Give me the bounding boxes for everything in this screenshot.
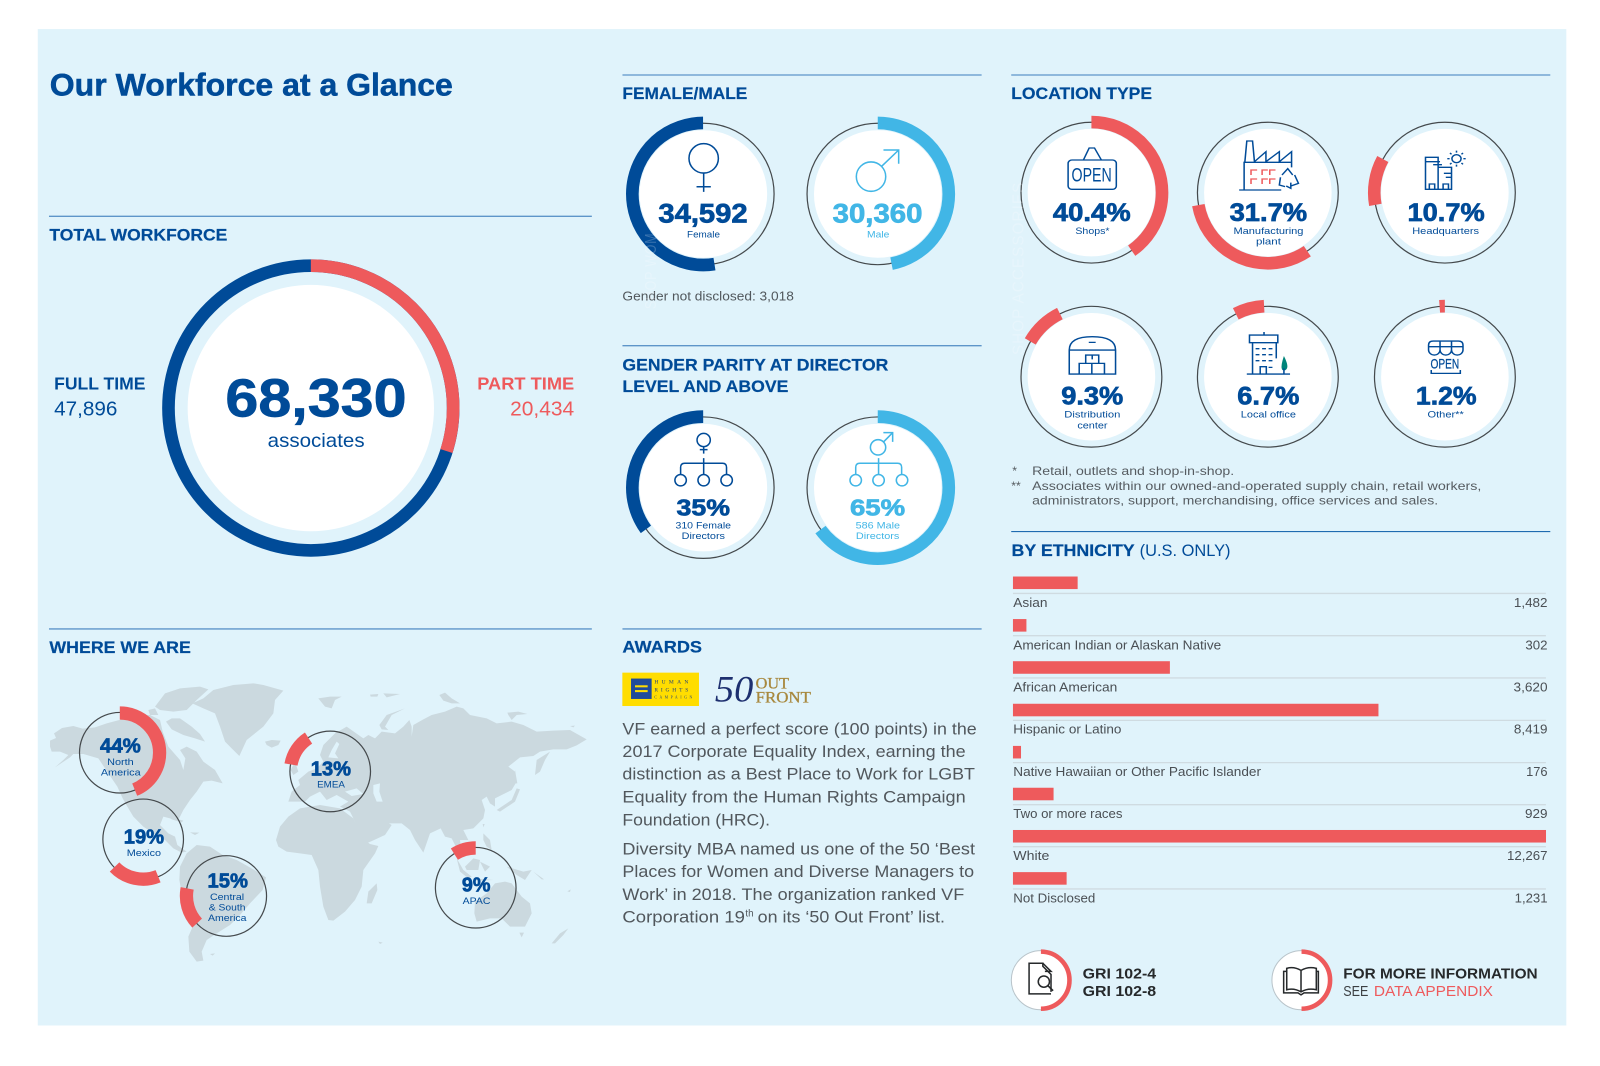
icon: open sign: OPEN bbox=[1072, 165, 1112, 186]
icon: open storefront bbox=[1429, 341, 1463, 373]
callout: more information: FOR MORE INFORMATION bbox=[1343, 967, 1538, 983]
region: central and south america 15%: & South bbox=[209, 903, 246, 914]
text block: hrc award bbox=[622, 719, 977, 829]
text block: diversity mba award bbox=[622, 839, 975, 927]
male directors donut bbox=[807, 417, 949, 559]
icon: open storefront: OPEN bbox=[1430, 356, 1459, 372]
part time label bbox=[477, 374, 574, 420]
male directors donut: Directors bbox=[856, 531, 900, 542]
location: distribution center bbox=[995, 280, 1188, 473]
heading: gender parity: GENDER PARITY AT DIRECTOR bbox=[622, 356, 888, 375]
callout: gri references: GRI 102-4 bbox=[1083, 967, 1156, 983]
panel: gender parity bbox=[604, 346, 982, 587]
heading: location type: LOCATION TYPE bbox=[1011, 84, 1152, 103]
icon: warehouse bbox=[1069, 337, 1116, 374]
heading: gender parity: LEVEL AND ABOVE bbox=[622, 377, 788, 396]
title: Our Workforce at a Glance bbox=[50, 68, 453, 103]
heading: awards: AWARDS bbox=[622, 638, 702, 657]
row: american indian or alaskan native bbox=[1013, 619, 1548, 652]
region: apac 9%: APAC bbox=[463, 896, 491, 907]
region: north america 44% bbox=[80, 712, 160, 793]
row: asian: Asian bbox=[1013, 595, 1047, 610]
logo: human rights campaign: CAMPAIGN bbox=[654, 695, 693, 699]
region: mexico 19%: Mexico bbox=[127, 848, 161, 859]
icon: headquarters building and sun bbox=[1425, 151, 1466, 189]
region: mexico 19% bbox=[91, 788, 195, 891]
part time label: PART TIME bbox=[477, 374, 574, 394]
location: headquarters: Headquarters bbox=[1412, 226, 1479, 237]
heading: where we are: WHERE WE ARE bbox=[49, 638, 191, 657]
callout: more information bbox=[1272, 951, 1538, 1010]
note: gender not disclosed: Gender not disclosed: 3,018 bbox=[622, 289, 794, 304]
footnotes: Associates within our owned-and-operated supply chain, retail workers, bbox=[1032, 479, 1481, 493]
full time label: FULL TIME bbox=[54, 374, 146, 394]
icon: male symbol bbox=[856, 150, 899, 191]
text block: diversity mba award: Work’ in 2018. The organization ranked VF bbox=[622, 885, 964, 904]
text block: hrc award: VF earned a perfect score (100 points) in the bbox=[622, 719, 977, 738]
location: local office: Local office bbox=[1241, 410, 1296, 421]
row: african american: 3,620 bbox=[1514, 680, 1548, 695]
row: white: 12,267 bbox=[1507, 848, 1548, 863]
female directors donut bbox=[604, 388, 803, 587]
text block: diversity mba award: th bbox=[745, 908, 754, 919]
male donut bbox=[807, 123, 949, 265]
footnotes: Retail, outlets and shop-in-shop. bbox=[1032, 464, 1234, 478]
logo: human rights campaign bbox=[622, 673, 699, 706]
row: not disclosed bbox=[1013, 872, 1548, 906]
donut chart: full time vs part time bbox=[168, 266, 453, 550]
region: mexico 19%: 19% bbox=[124, 826, 164, 848]
row: african american: African American bbox=[1013, 680, 1117, 695]
location: distribution center: 9.3% bbox=[1061, 383, 1123, 411]
icon: female org chart bbox=[675, 433, 732, 486]
location: other bbox=[1369, 301, 1521, 452]
heading: gender parity bbox=[622, 356, 888, 396]
location: manufacturing plant: Manufacturing bbox=[1233, 226, 1303, 237]
region: north america 44%: North bbox=[107, 757, 134, 768]
callout: more information: SEE bbox=[1343, 984, 1369, 1000]
logo: human rights campaign: RIGHTS bbox=[654, 687, 688, 693]
female donut: 34,592 bbox=[658, 198, 748, 228]
location: distribution center: Distribution bbox=[1064, 410, 1120, 421]
male donut: 30,360 bbox=[833, 198, 922, 228]
region: north america 44%: America bbox=[101, 767, 141, 778]
female donut: Female bbox=[687, 229, 720, 240]
full time label: 47,896 bbox=[54, 398, 117, 420]
footnotes: ** bbox=[1011, 479, 1021, 493]
row: native hawaiian or other pacific islander: Native Hawaiian or Other Pacific Islander bbox=[1013, 764, 1262, 779]
icon: factory with recycling bbox=[1239, 141, 1298, 190]
logo: human rights campaign: HUMAN bbox=[654, 679, 688, 685]
callout: gri references bbox=[1011, 951, 1156, 1010]
text block: diversity mba award: Diversity MBA named us one of the 50 ‘Best bbox=[622, 839, 975, 858]
row: american indian or alaskan native: 302 bbox=[1525, 637, 1548, 652]
world map bbox=[50, 683, 587, 962]
region: central and south america 15%: America bbox=[208, 913, 247, 924]
region: emea 13%: 13% bbox=[311, 758, 351, 780]
icon: open book bbox=[1272, 951, 1331, 1010]
location: other: Other** bbox=[1428, 410, 1464, 421]
panel: female/male bbox=[622, 75, 982, 304]
heading: by ethnicity: (U.S. ONLY) bbox=[1140, 541, 1231, 560]
row: two or more races bbox=[1013, 788, 1548, 821]
location: headquarters bbox=[1363, 111, 1527, 274]
region: emea 13%: EMEA bbox=[317, 779, 346, 790]
text block: hrc award: 2017 Corporate Equality Index, earning the bbox=[622, 742, 966, 761]
female directors donut: Directors bbox=[682, 531, 725, 542]
row: white: White bbox=[1013, 848, 1049, 863]
heading: female/male: FEMALE/MALE bbox=[622, 84, 747, 103]
male directors donut: 586 Male bbox=[856, 520, 900, 531]
female donut bbox=[622, 113, 785, 275]
row: native hawaiian or other pacific islander bbox=[1013, 746, 1548, 779]
logo: 50 out front bbox=[715, 669, 811, 710]
text block: diversity mba award: Places for Women and Diverse Managers to bbox=[622, 862, 974, 881]
row: asian: 1,482 bbox=[1514, 595, 1548, 610]
text block: hrc award: distinction as a Best Place to Work for LGBT bbox=[622, 765, 975, 784]
part time label: 20,434 bbox=[510, 398, 574, 420]
logo: 50 out front: OUT bbox=[756, 675, 789, 692]
region: central and south america 15% bbox=[170, 840, 282, 952]
row: american indian or alaskan native: American Indian or Alaskan Native bbox=[1013, 637, 1221, 652]
icon: female symbol bbox=[689, 144, 718, 192]
female directors donut: 310 Female bbox=[676, 520, 731, 531]
panel: by ethnicity bbox=[1011, 532, 1550, 906]
heading: by ethnicity bbox=[1012, 541, 1231, 560]
location: distribution center: center bbox=[1077, 420, 1108, 431]
icon: open sign bbox=[1068, 148, 1116, 189]
location: shops bbox=[1021, 122, 1162, 263]
location: local office: 6.7% bbox=[1237, 383, 1299, 411]
row: not disclosed: 1,231 bbox=[1515, 891, 1548, 906]
location: manufacturing plant bbox=[1170, 95, 1366, 291]
panel: total workforce bbox=[49, 216, 592, 550]
row: white bbox=[1013, 830, 1548, 863]
row: hispanic or latino: 8,419 bbox=[1514, 722, 1548, 737]
location: other: 1.2% bbox=[1416, 383, 1477, 411]
row: asian bbox=[1013, 577, 1548, 610]
heading: total workforce: TOTAL WORKFORCE bbox=[49, 225, 227, 244]
callout: gri references: GRI 102-8 bbox=[1083, 984, 1156, 1000]
heading: by ethnicity: BY ETHNICITY bbox=[1012, 541, 1135, 560]
region: apac 9%: 9% bbox=[462, 875, 490, 897]
icon: document search bbox=[1011, 951, 1071, 1010]
footnotes: administrators, support, merchandising, office services and sales. bbox=[1032, 494, 1438, 508]
icon: office building with tree bbox=[1247, 332, 1290, 374]
region: central and south america 15%: 15% bbox=[208, 871, 248, 893]
region: central and south america 15%: Central bbox=[210, 892, 244, 903]
text block: hrc award: Foundation (HRC). bbox=[622, 810, 770, 829]
full time label bbox=[54, 374, 146, 420]
icon: male org chart bbox=[850, 433, 908, 486]
panel: awards bbox=[622, 629, 982, 927]
location: shops: 40.4% bbox=[1053, 199, 1131, 227]
row: two or more races: 929 bbox=[1525, 806, 1548, 821]
location: local office bbox=[1173, 282, 1363, 472]
footnotes: * bbox=[1012, 464, 1017, 478]
row: native hawaiian or other pacific islander: 176 bbox=[1526, 764, 1548, 779]
text block: hrc award: Equality from the Human Rights Campaign bbox=[622, 788, 966, 807]
associates label: associates bbox=[268, 430, 365, 452]
logo: 50 out front: 50 bbox=[715, 669, 753, 710]
row: african american bbox=[1013, 661, 1548, 695]
row: hispanic or latino: Hispanic or Latino bbox=[1013, 722, 1121, 737]
watermark: shop women: SHOP WOM bbox=[643, 233, 660, 309]
region: emea 13% bbox=[284, 725, 376, 818]
total number: 68,330 bbox=[225, 368, 407, 428]
row: not disclosed: Not Disclosed bbox=[1013, 891, 1095, 906]
location: headquarters: 10.7% bbox=[1408, 199, 1485, 227]
watermark: shop accessories: SHOP ACCESSORIES bbox=[1010, 182, 1027, 355]
location: manufacturing plant: plant bbox=[1256, 236, 1281, 247]
panel: where we are bbox=[49, 629, 592, 962]
bar chart: ethnicity bbox=[1013, 577, 1548, 906]
footnotes bbox=[1011, 464, 1481, 508]
female directors donut: 35% bbox=[677, 495, 730, 521]
row: hispanic or latino bbox=[1013, 704, 1548, 737]
region: apac 9% bbox=[421, 833, 531, 943]
callout: more information: DATA APPENDIX bbox=[1374, 984, 1493, 1000]
male donut: Male bbox=[867, 229, 889, 240]
male directors donut: 65% bbox=[850, 495, 905, 521]
location: manufacturing plant: 31.7% bbox=[1230, 199, 1307, 227]
location: shops: Shops* bbox=[1075, 226, 1110, 237]
panel: location type bbox=[995, 75, 1550, 508]
row: two or more races: Two or more races bbox=[1013, 806, 1123, 821]
region: north america 44%: 44% bbox=[100, 736, 141, 758]
text block: diversity mba award: on its ‘50 Out Front’ list. bbox=[758, 908, 945, 927]
logo: 50 out front: FRONT bbox=[756, 689, 811, 706]
text block: diversity mba award: Corporation 19 bbox=[622, 908, 745, 927]
